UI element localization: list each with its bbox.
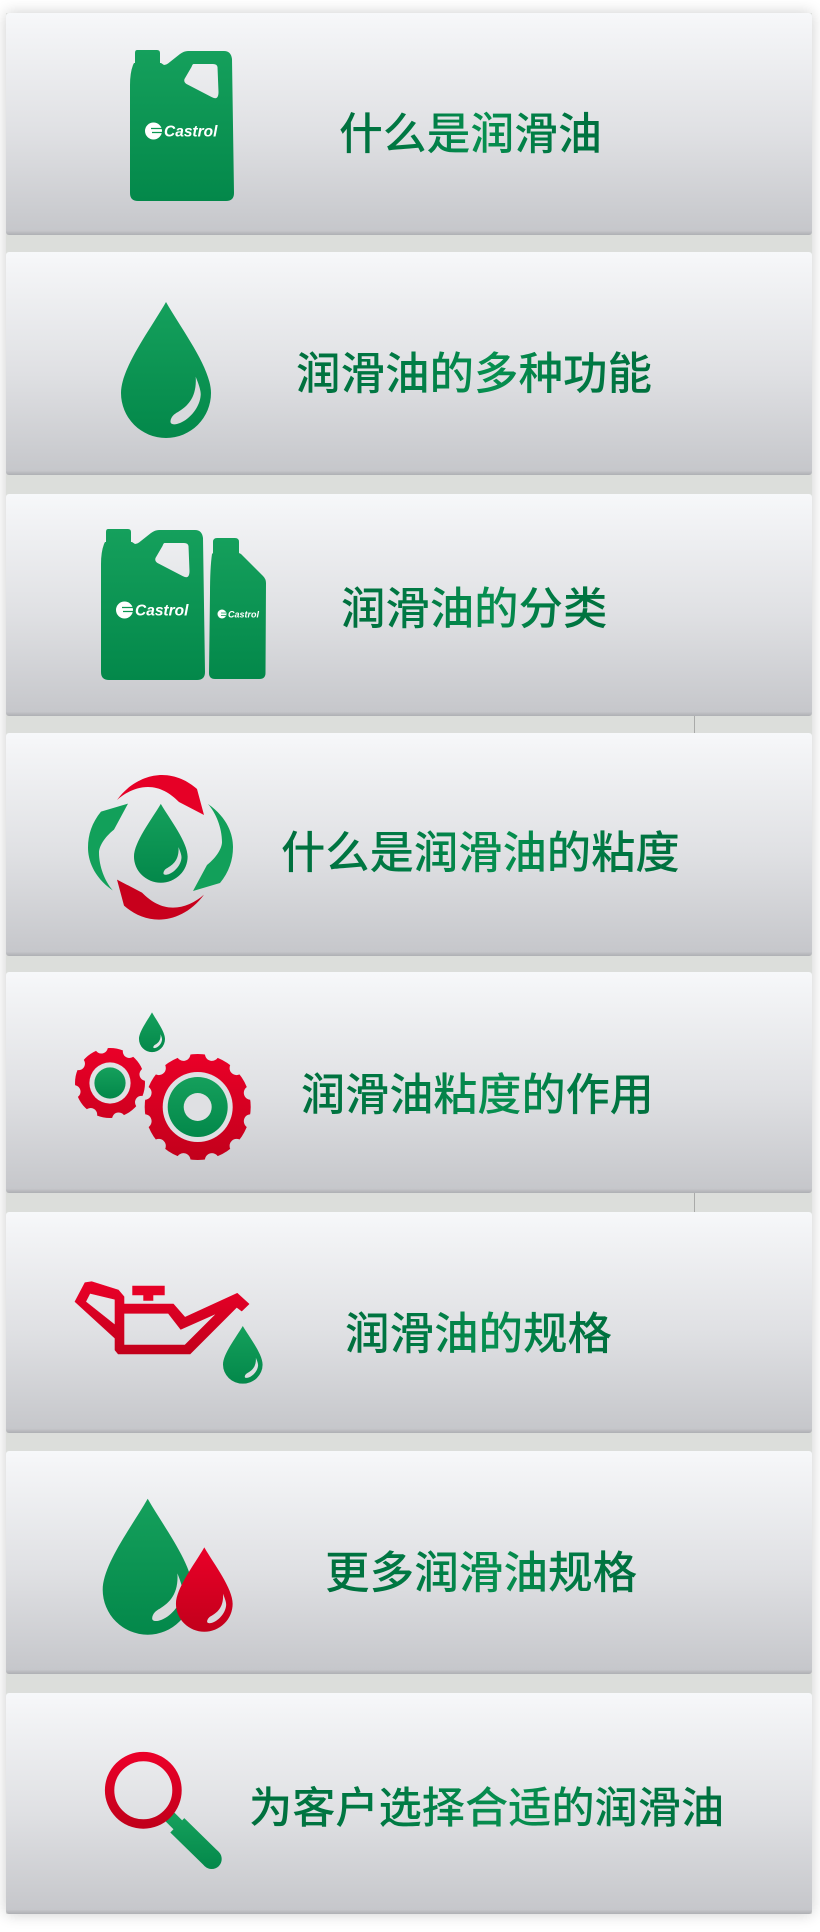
icon: gears and drop (75, 1012, 251, 1160)
large jug: Castrol (135, 602, 189, 620)
heading: 更多润滑油规格 (325, 1549, 637, 1598)
icon: Castrol jug: Castrol (164, 124, 218, 140)
icon: circulating arrows and drop (88, 775, 233, 920)
icon: oil can and drop (74, 1281, 263, 1384)
heading: 润滑油的分类 (341, 585, 607, 634)
divider tick (694, 1193, 695, 1212)
panel: what is viscosity (6, 733, 812, 956)
icon: green and red drops (102, 1498, 233, 1635)
small bottle: Castrol (228, 610, 260, 620)
green drop (103, 1499, 193, 1635)
icon: Castrol jug (130, 50, 234, 201)
icon: two Castrol containers (101, 529, 266, 680)
handle (166, 1813, 222, 1869)
large jug (101, 529, 205, 680)
oil drop (223, 1326, 263, 1384)
divider tick (694, 716, 695, 733)
heading: 润滑油粘度的作用 (301, 1071, 654, 1120)
panel: functions of lubricant (6, 252, 812, 475)
panel: specifications (6, 1212, 812, 1433)
icon: magnifying glass (104, 1752, 222, 1869)
red drop (176, 1547, 233, 1632)
oil can (75, 1282, 249, 1354)
heading: 为客户选择合适的润滑油 (249, 1785, 724, 1833)
large gear (145, 1054, 251, 1160)
panel: lubricant classes (6, 494, 812, 716)
heading: 润滑油的多种功能 (296, 350, 652, 399)
icon: oil drop (121, 302, 211, 438)
panel: what is lubricant (6, 13, 812, 235)
small drop (139, 1012, 165, 1052)
heading: 什么是润滑油的粘度 (281, 829, 680, 878)
panel: effect of viscosity (6, 972, 812, 1193)
small bottle (209, 538, 266, 679)
panel: more specifications (6, 1451, 812, 1674)
heading: 润滑油的规格 (345, 1310, 612, 1359)
lens ring (110, 1757, 177, 1824)
heading: 什么是润滑油 (339, 110, 602, 159)
panel: choosing lubricant (6, 1693, 812, 1914)
small gear (75, 1048, 145, 1118)
